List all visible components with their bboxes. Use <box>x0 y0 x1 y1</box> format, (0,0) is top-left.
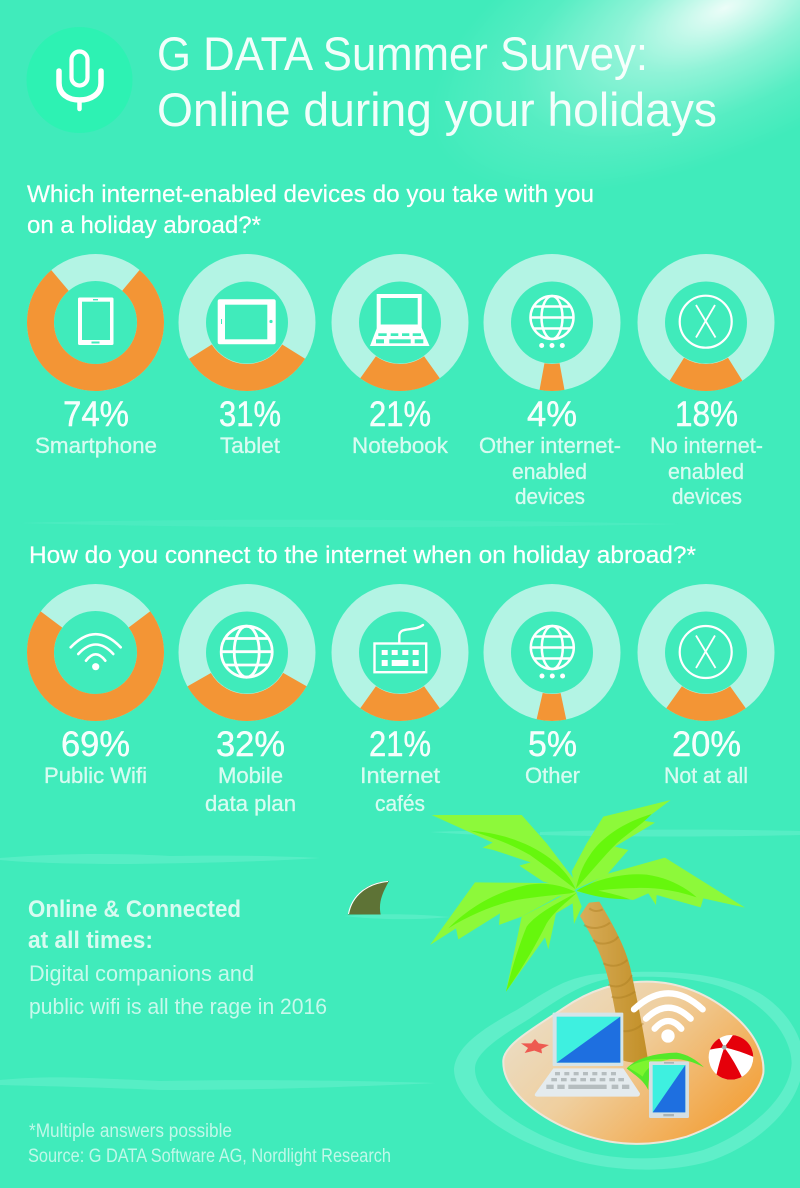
palm frond upper right <box>572 800 671 889</box>
label: devices <box>515 484 585 509</box>
title <box>157 27 717 136</box>
heading: devices question: on a holiday abroad?* <box>27 212 261 239</box>
label: data plan <box>205 791 296 816</box>
icon: crossed circle <box>680 296 732 348</box>
panel: smartphone 74% <box>18 245 173 458</box>
value: 69% <box>61 725 130 764</box>
value: 20% <box>672 725 741 764</box>
icon: globe with dots <box>530 296 574 348</box>
title: G DATA Summer Survey: <box>157 27 648 80</box>
icon: globe <box>221 626 272 677</box>
heading: connection question: How do you connect to the internet when on holiday abroad?* <box>29 542 696 569</box>
wave bands <box>0 520 800 1090</box>
devices on the island <box>535 993 704 1118</box>
label: Other <box>525 763 580 788</box>
label: Public Wifi <box>44 763 147 788</box>
text block: conclusion <box>28 896 327 1019</box>
label: Internet <box>360 763 440 788</box>
heading: devices question: Which internet-enabled devices do you take with you <box>27 181 594 208</box>
footnote and source <box>28 1121 391 1167</box>
value: 21% <box>369 395 431 434</box>
label: Mobile <box>218 763 283 788</box>
heading: devices question <box>27 181 594 239</box>
value: 32% <box>216 725 285 764</box>
icon: crossed circle <box>680 626 732 678</box>
value: 5% <box>528 725 577 764</box>
palm trunk <box>580 902 648 1062</box>
island halo <box>454 972 800 1170</box>
sun glow <box>0 0 800 400</box>
text block: conclusion: at all times: <box>28 927 153 954</box>
text block: conclusion: Digital companions and <box>29 961 254 986</box>
icon: notebook <box>370 296 430 346</box>
value: 31% <box>219 395 281 434</box>
label: Smartphone <box>35 433 157 458</box>
value: 18% <box>675 395 738 434</box>
label: Tablet <box>220 433 280 458</box>
title icon: microphone <box>26 27 132 133</box>
label: devices <box>672 484 742 509</box>
value: 4% <box>527 395 577 434</box>
icon: globe with dots <box>531 626 574 678</box>
wifi symbol <box>634 993 703 1043</box>
panel: other devices 4% <box>479 254 621 509</box>
label <box>205 763 296 816</box>
text block: conclusion: public wifi is all the rage in 2016 <box>29 994 327 1019</box>
panel: internet cafes 21% <box>323 576 477 816</box>
tablet <box>649 1061 689 1118</box>
starfish <box>521 1039 549 1053</box>
icon: tablet <box>218 299 276 344</box>
label: enabled <box>512 459 587 484</box>
palm tree <box>430 800 745 1062</box>
laptop <box>535 1013 640 1097</box>
label: Notebook <box>352 433 449 458</box>
label <box>360 763 440 816</box>
label: enabled <box>668 459 744 484</box>
panel: tablet 31% <box>171 247 323 458</box>
beach ball <box>708 1035 754 1080</box>
panel: no devices 18% <box>630 247 782 509</box>
illustration: island with palm tree and devices <box>430 800 800 1170</box>
footnote and source: Source: G DATA Software AG, Nordlight Research <box>28 1146 391 1167</box>
title: Online during your holidays <box>157 83 717 136</box>
icon: wifi <box>71 634 121 670</box>
icon: keyboard <box>374 625 426 672</box>
text block: conclusion: Online & Connected <box>28 896 241 923</box>
panel: other connection 5% <box>484 584 620 788</box>
label: Not at all <box>664 763 748 788</box>
value: 21% <box>369 725 431 764</box>
label: Other internet- <box>479 433 621 458</box>
footnote and source: *Multiple answers possible <box>29 1121 232 1142</box>
label <box>650 433 763 509</box>
panel: public wifi 69% <box>18 575 173 788</box>
panel: not at all 20% <box>629 576 783 788</box>
palm frond right <box>577 858 745 908</box>
small palm fronds <box>627 1053 704 1090</box>
panel: mobile data plan 32% <box>172 578 322 816</box>
island sand <box>503 982 763 1144</box>
palm frond lower <box>506 892 582 992</box>
panel: notebook 21% <box>323 246 477 458</box>
palm frond left <box>430 882 577 945</box>
value: 74% <box>63 395 129 434</box>
label: No internet- <box>650 433 763 458</box>
icon: smartphone <box>78 298 114 345</box>
island base <box>454 972 800 1170</box>
palm frond upper left <box>432 815 576 891</box>
shark fin <box>348 881 389 914</box>
label: cafés <box>375 791 425 816</box>
label <box>479 433 621 509</box>
